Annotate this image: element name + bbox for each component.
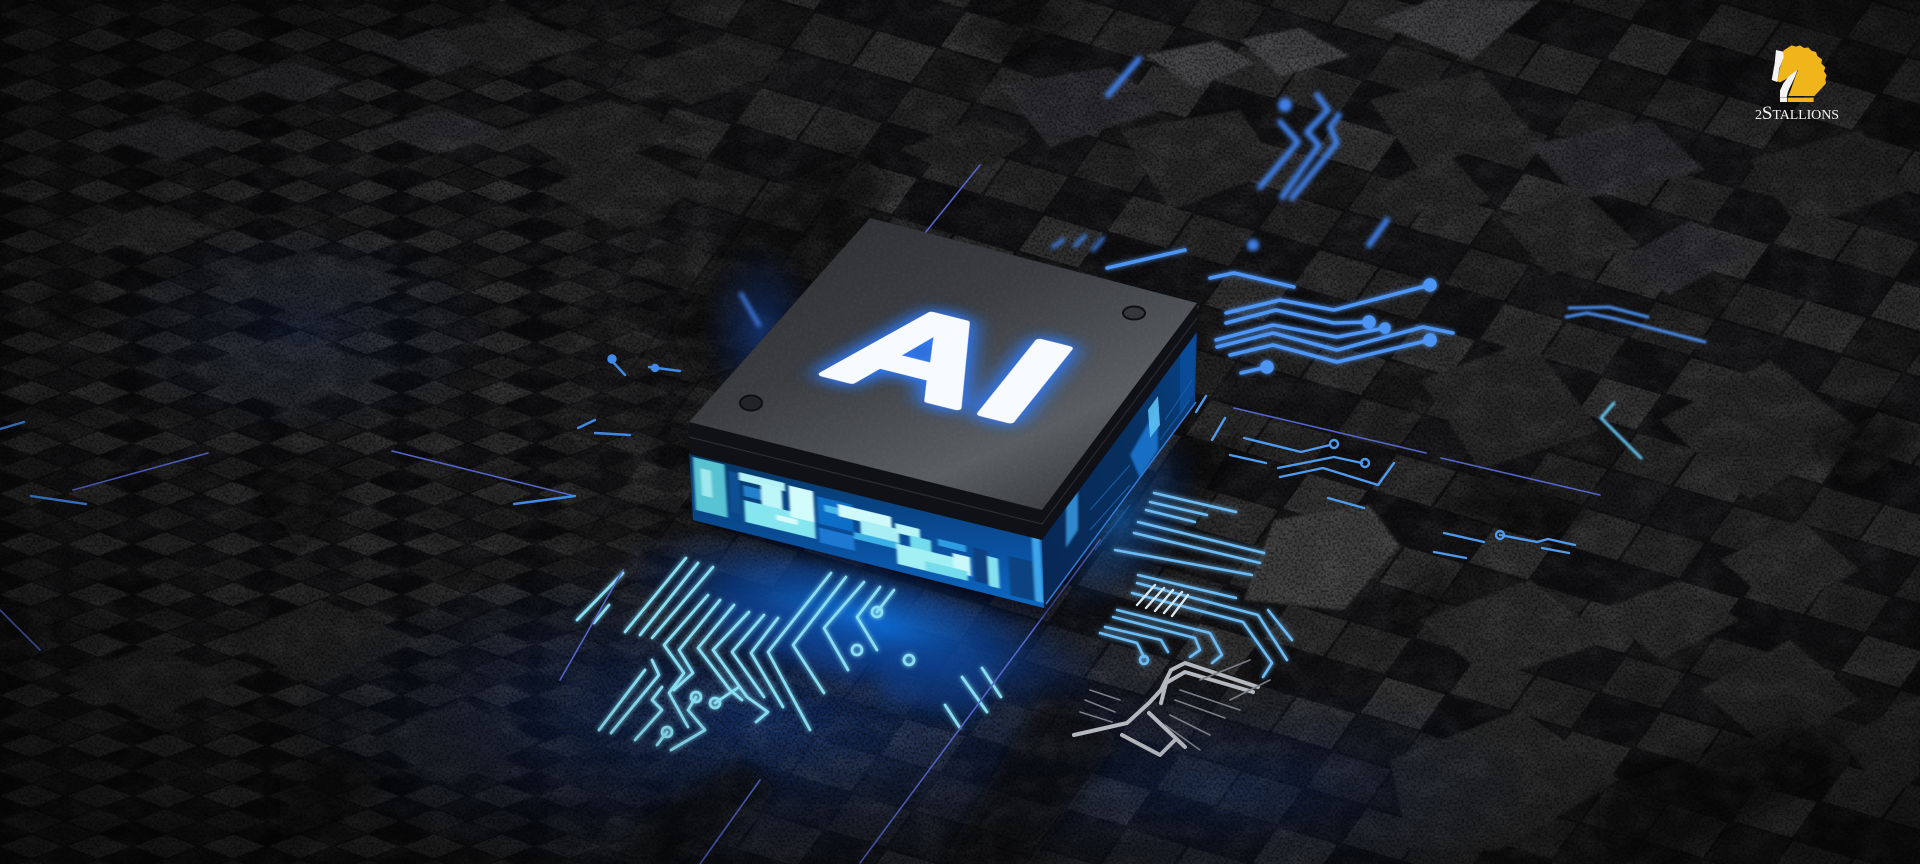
circuit traces: far right — [1566, 307, 1705, 458]
chip light glow on the board — [599, 240, 1240, 753]
chip plate side — [689, 303, 1197, 540]
chip shadow — [690, 250, 1200, 620]
chip front glass face — [689, 452, 1044, 608]
logo wordmark: 2STALLIONS — [1755, 103, 1839, 124]
circuit traces: bottom left — [577, 558, 1001, 750]
circuit traces: left of chip — [0, 356, 680, 504]
circuit traces: right of chip — [1100, 493, 1292, 677]
circuit traces: blurred upper blue lines — [741, 59, 1387, 325]
circuit traces: white cluster and grey board paths — [1074, 585, 1270, 755]
AI chip — [689, 218, 1200, 620]
icon: horse head — [1772, 45, 1827, 102]
logo: 2Stallions — [1755, 45, 1839, 124]
glowing AI label: AI — [800, 277, 1100, 447]
chip right glass face — [1042, 325, 1197, 608]
chip top surface — [689, 218, 1197, 510]
blue tint near chip — [280, 550, 1240, 864]
screw holes — [740, 306, 1145, 410]
circuit traces: thin lines — [0, 165, 1600, 864]
circuit traces: mid right small — [1196, 396, 1575, 558]
circuit traces: fan of blue lines — [1107, 250, 1453, 373]
